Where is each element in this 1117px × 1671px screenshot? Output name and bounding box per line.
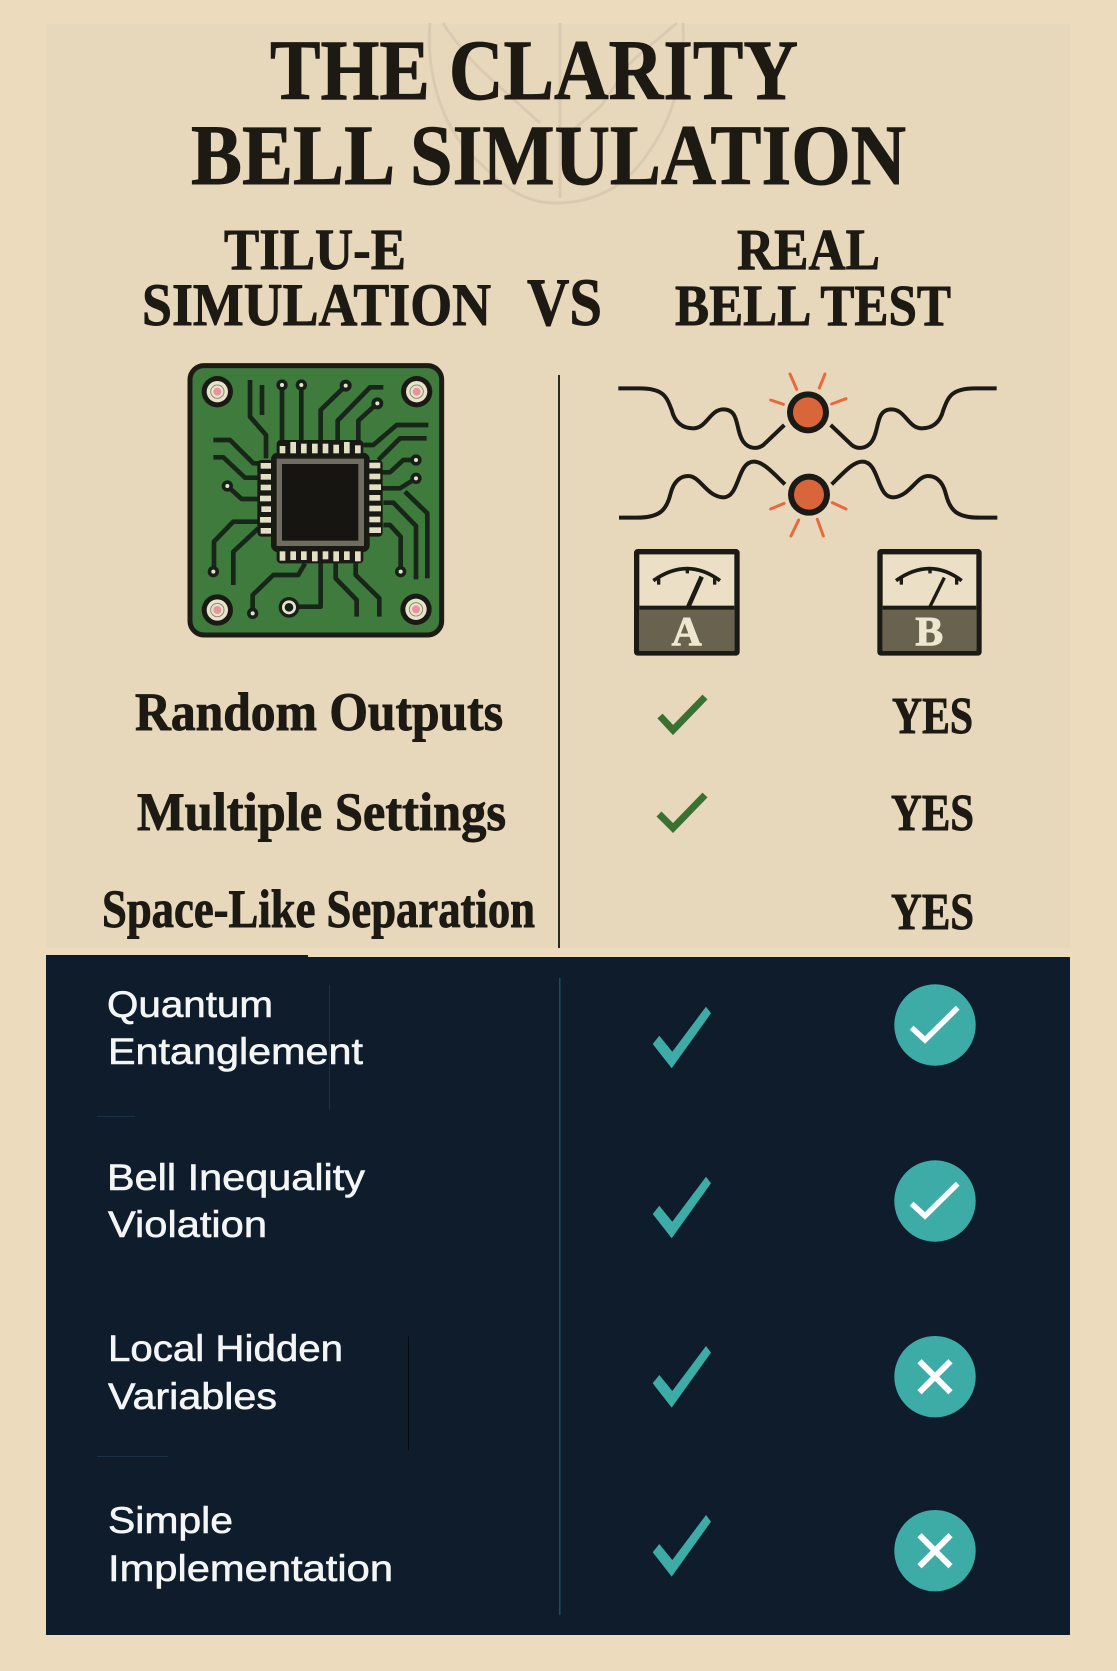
- row: simple implementation: Simple: [108, 1500, 233, 1541]
- row: multiple settings: YES: [891, 785, 974, 842]
- meter A: [637, 552, 737, 655]
- row: simple implementation: Implementation: [108, 1548, 393, 1589]
- wavy photon lines: [618, 388, 997, 518]
- heading: real Bell test: [675, 217, 951, 338]
- meter B: B: [915, 609, 943, 655]
- heading: VS: VS: [527, 264, 602, 340]
- illustration: entangled photons and detector meters: [618, 374, 997, 655]
- row: Bell inequality violation: Violation: [108, 1204, 267, 1245]
- meter B: [880, 552, 979, 655]
- row: random outputs: [135, 682, 973, 745]
- icon: circuit board with microchip: [190, 366, 442, 635]
- row: simple implementation: [108, 1500, 976, 1591]
- row: local hidden variables: [108, 1328, 976, 1417]
- row: local hidden variables: Variables: [108, 1376, 277, 1417]
- row: space-like separation: Space-Like Separation: [102, 879, 535, 939]
- upper particle: [771, 374, 846, 433]
- panel: dark comparison table: [46, 957, 1070, 1635]
- row: space-like separation: YES: [891, 884, 974, 941]
- meter A: A: [672, 609, 702, 655]
- row: quantum entanglement: [107, 984, 976, 1072]
- divider between left labels and right columns: [558, 375, 560, 948]
- heading: real Bell test: REAL: [737, 217, 880, 282]
- row: random outputs: YES: [892, 688, 973, 745]
- title: BELL SIMULATION: [191, 107, 906, 203]
- panel: comparison header and illustrations: [46, 24, 1070, 948]
- heading: real Bell test: BELL TEST: [675, 273, 951, 338]
- row: multiple settings: [137, 782, 974, 842]
- row: space-like separation: [102, 879, 974, 941]
- heading: TILU-E simulation: SIMULATION: [142, 272, 491, 338]
- row: local hidden variables: Local Hidden: [108, 1328, 343, 1369]
- watermark: faint bell outline behind the title: [429, 23, 683, 203]
- heading: TILU-E simulation: [142, 217, 491, 338]
- row: Bell inequality violation: Bell Inequality: [107, 1157, 366, 1198]
- title: [191, 22, 906, 203]
- row: random outputs: Random Outputs: [135, 682, 503, 742]
- heading: TILU-E simulation: TILU-E: [224, 217, 406, 282]
- row: quantum entanglement: Entanglement: [108, 1031, 364, 1072]
- row: multiple settings: Multiple Settings: [137, 782, 506, 842]
- lower particle: [771, 474, 846, 536]
- title: THE CLARITY: [270, 22, 798, 118]
- row: Bell inequality violation: [107, 1157, 976, 1245]
- row: quantum entanglement: Quantum: [107, 984, 273, 1025]
